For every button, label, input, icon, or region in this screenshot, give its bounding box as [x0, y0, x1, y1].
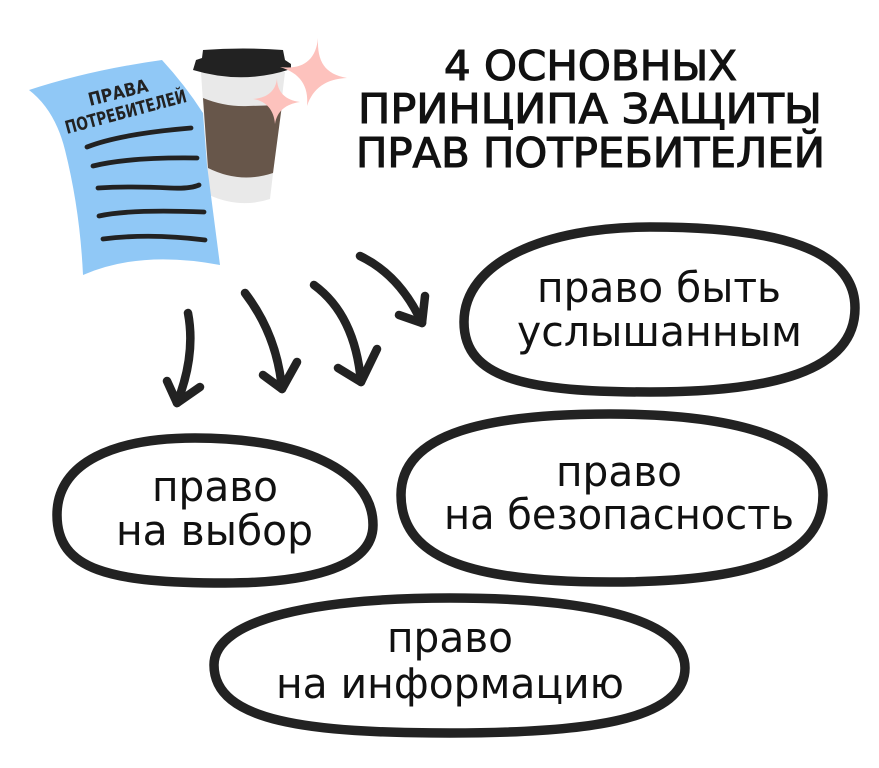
- bubble: право на информацию: на информацию: [276, 659, 624, 708]
- title: ПРИНЦИПА ЗАЩИТЫ: [358, 85, 822, 133]
- bubble: право на безопасность: право: [556, 447, 682, 496]
- bubble: право на информацию: [214, 598, 685, 733]
- icon: small sparkle: [253, 78, 300, 124]
- icon: large sparkle: [280, 38, 347, 106]
- arrow 3: [314, 285, 377, 382]
- title: [356, 42, 825, 177]
- document subtitle: ПОТРЕБИТЕЛЕЙ: [63, 85, 189, 139]
- bubble: право на безопасность: [401, 414, 823, 582]
- icon: coffee cup: [193, 48, 291, 203]
- bubble: право на выбор: на выбор: [116, 506, 313, 555]
- bubble: право быть услышанным: [464, 227, 855, 392]
- bubble: право на выбор: [57, 438, 373, 583]
- bubble: право на выбор: право: [152, 462, 278, 511]
- icon: consumer rights document: [29, 60, 220, 275]
- arrow 4: [360, 256, 425, 323]
- title: 4 ОСНОВНЫХ: [444, 42, 737, 90]
- arrow 1: [167, 313, 200, 403]
- illustration: document, coffee and sparkles: [29, 38, 347, 275]
- bubble: право на информацию: право: [387, 613, 513, 662]
- document title: ПРАВА: [86, 76, 150, 111]
- arrow 2: [245, 293, 297, 389]
- title: ПРАВ ПОТРЕБИТЕЛЕЙ: [356, 129, 825, 177]
- bubble: право на безопасность: на безопасность: [444, 490, 794, 539]
- bubble: право быть услышанным: услышанным: [517, 307, 802, 356]
- bubble: право быть услышанным: право быть: [537, 263, 781, 312]
- document text lines: [87, 128, 205, 240]
